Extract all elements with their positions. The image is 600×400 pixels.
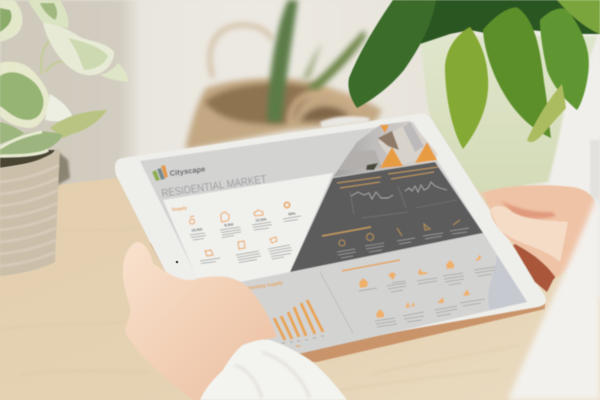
large pale-green plant pot xyxy=(420,36,598,192)
dark panel headings xyxy=(337,167,438,188)
orange triangles xyxy=(380,147,403,168)
screen top button xyxy=(320,116,370,128)
wicker basket with plant xyxy=(186,25,382,150)
pot ribs xyxy=(0,165,59,266)
swoosh shape xyxy=(488,255,527,310)
infographic screen xyxy=(140,121,527,367)
leaf: upper tail xyxy=(100,63,128,82)
leaf: left dark xyxy=(348,0,436,108)
leaf: upper pale xyxy=(43,23,114,75)
leaf: small lower xyxy=(527,84,566,142)
tablet body xyxy=(115,114,546,362)
supply figures: 15,000 xyxy=(191,227,203,233)
line chart right xyxy=(405,182,447,192)
logo name: Cityscape xyxy=(169,164,206,178)
leaf: top-right bright xyxy=(557,0,600,34)
hand xyxy=(483,185,596,278)
leaf: left small xyxy=(0,122,24,144)
shadow under hand xyxy=(513,225,565,292)
sleeve stripes xyxy=(235,352,310,398)
lower section icons xyxy=(359,255,481,318)
wall background xyxy=(0,0,600,200)
table grain xyxy=(0,228,520,390)
lower section captions xyxy=(359,267,495,327)
table xyxy=(0,150,600,400)
big leaves plant xyxy=(348,0,600,149)
leaf: low xyxy=(0,131,63,157)
dark panel icons xyxy=(339,220,460,246)
heading: housing supply: Housing supply xyxy=(245,280,284,292)
small dark plant xyxy=(366,163,378,170)
shadow beside small pot xyxy=(56,150,70,186)
supply captions xyxy=(190,216,301,264)
lower section divider xyxy=(320,272,353,333)
thumb xyxy=(490,206,568,262)
header photo of residential building xyxy=(333,121,437,177)
small variegated plant xyxy=(0,0,128,168)
line chart left xyxy=(351,192,393,199)
beige ribbed pot xyxy=(0,148,60,276)
dark panel captions xyxy=(337,228,469,258)
leaf: top left xyxy=(0,0,22,42)
stems xyxy=(41,40,65,74)
finger crease xyxy=(500,200,556,218)
bar chart xyxy=(274,300,323,340)
bright wall right of pot xyxy=(550,60,600,215)
leaf: olive xyxy=(50,110,107,138)
screen base xyxy=(140,122,527,367)
tablet xyxy=(115,114,546,367)
dark leaf mass xyxy=(420,0,600,44)
title: RESIDENTIAL MARKET xyxy=(161,173,268,200)
right hand xyxy=(483,185,596,292)
supply figures: 8,000 xyxy=(224,222,234,228)
bar chart axis labels xyxy=(282,336,324,343)
leaf: hanging yellow-green xyxy=(445,27,488,149)
tablet shadow edge xyxy=(150,243,545,364)
leaf: centre xyxy=(483,7,551,138)
pale object at right edge xyxy=(590,140,600,210)
logo xyxy=(152,164,206,181)
leaf: big variegated xyxy=(0,62,50,128)
leaf: right xyxy=(540,8,589,110)
supply figures: 95% xyxy=(288,211,296,216)
supply figures: 12,000 xyxy=(255,217,267,223)
leaf: pale white xyxy=(45,94,73,121)
left hand xyxy=(123,242,277,400)
heading: lower right xyxy=(342,260,400,271)
background plant blades xyxy=(267,0,366,122)
home button xyxy=(176,261,178,263)
heading: future impact xyxy=(322,227,371,236)
dark stats panel xyxy=(290,162,483,272)
supply icons xyxy=(190,202,290,256)
supply figures xyxy=(191,211,296,233)
white book page right xyxy=(508,200,600,400)
leaf: top pale xyxy=(28,0,69,28)
shirt sleeve xyxy=(200,340,347,400)
building facades xyxy=(338,150,382,170)
logo mark xyxy=(152,165,168,181)
heading: supply: Supply xyxy=(172,205,188,212)
soil xyxy=(0,150,55,168)
white supply panel xyxy=(163,173,333,282)
chart legend xyxy=(296,345,300,347)
chart axes xyxy=(350,186,457,218)
